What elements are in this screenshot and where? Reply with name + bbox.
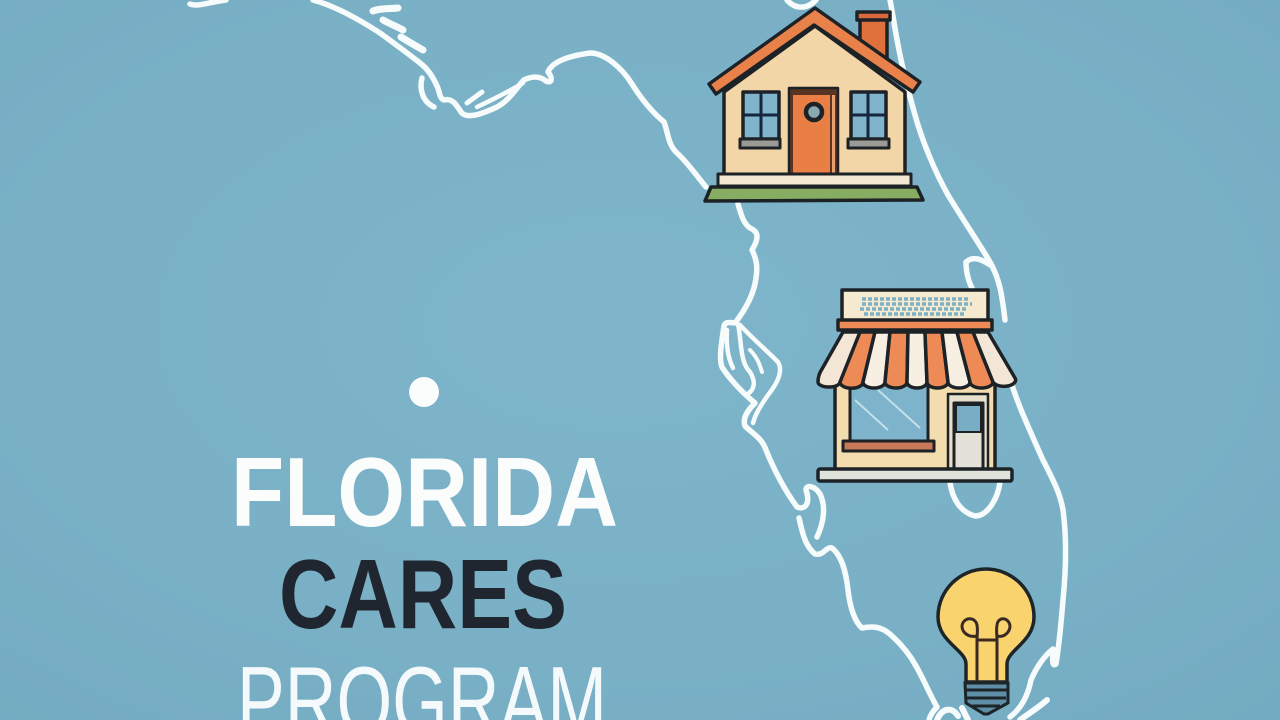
decorative dot xyxy=(409,377,439,407)
map: Florida outline xyxy=(190,0,1066,720)
house left window xyxy=(740,92,780,148)
shop sign xyxy=(842,290,988,321)
icon: storefront xyxy=(818,290,1016,481)
title line: FLORIDA: FLORIDA xyxy=(231,437,618,547)
house wall xyxy=(724,26,905,176)
icon: light bulb xyxy=(938,569,1034,714)
title line: CARES: CARES xyxy=(279,539,567,649)
shop window xyxy=(843,385,934,451)
house right window xyxy=(848,92,889,148)
shop wall xyxy=(835,380,995,470)
shop door xyxy=(948,394,988,469)
shop pavement xyxy=(818,469,1012,481)
house chimney xyxy=(857,12,890,58)
house step xyxy=(718,174,911,186)
house roof xyxy=(709,8,920,94)
house door xyxy=(789,88,838,174)
bulb filament xyxy=(962,619,1010,681)
bulb screw base xyxy=(965,683,1008,714)
bulb glass xyxy=(938,569,1034,682)
title xyxy=(231,437,618,720)
shop awning xyxy=(818,320,1016,388)
icon: house xyxy=(705,8,923,201)
house lawn xyxy=(705,187,923,201)
